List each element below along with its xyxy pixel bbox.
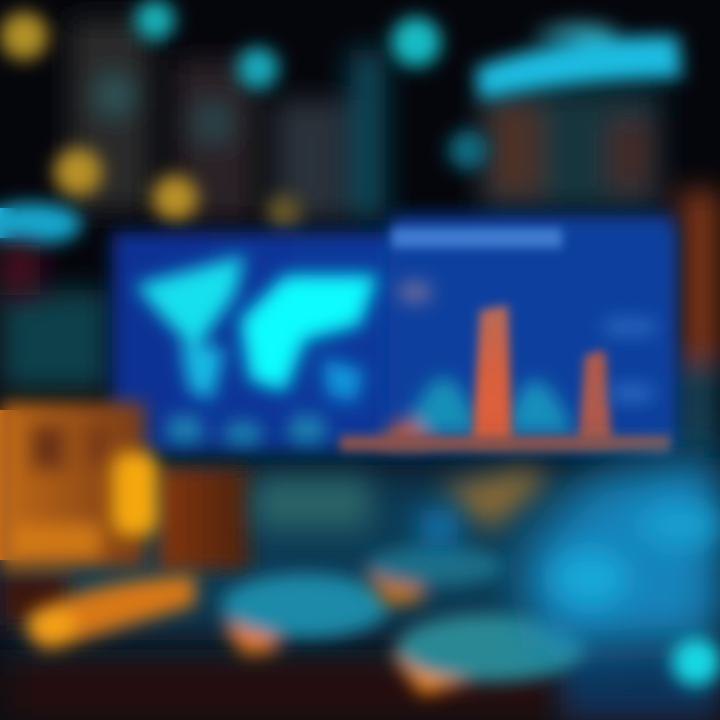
background: cyan awning top right bbox=[475, 22, 682, 100]
icon: cyan glow bottom right bbox=[672, 638, 720, 686]
panel glow: right column bbox=[390, 215, 675, 445]
icon: orange pill left bbox=[27, 575, 195, 650]
text: legend right column bbox=[400, 282, 655, 401]
background: cyan sign left edge fill bbox=[0, 208, 18, 238]
icon: small disc centre bbox=[365, 546, 503, 606]
panel: blue cards right bbox=[520, 455, 720, 650]
background: cyan sign left bbox=[0, 203, 82, 245]
background: bokeh lights bbox=[0, 0, 488, 229]
icon: teal disc centre right bbox=[392, 614, 584, 695]
stack: left edge fill bbox=[0, 410, 24, 560]
stack: orange coins left bbox=[0, 402, 145, 625]
heading: screen title bar bbox=[392, 228, 562, 248]
icon: yellow glow bbox=[112, 452, 158, 536]
background: red glow left bbox=[0, 245, 40, 295]
chart: red bars bbox=[472, 305, 612, 445]
chart: area peaks bbox=[380, 378, 575, 445]
map: world continents bbox=[135, 255, 378, 402]
chart: left baseline marks bbox=[168, 416, 324, 446]
panel: navy corner bottom right bbox=[560, 640, 720, 720]
panel: teal tablet middle bbox=[255, 478, 370, 528]
icon: teal disc centre left bbox=[221, 574, 389, 655]
icon: orange gold mid bbox=[440, 468, 550, 530]
chart: baseline bbox=[340, 436, 670, 452]
block: brown box bbox=[158, 468, 250, 570]
background: city buildings bbox=[0, 20, 720, 450]
desk base bbox=[0, 650, 720, 720]
panel: dashboard screen bbox=[112, 215, 675, 454]
icon: bright blue glows right bbox=[420, 503, 720, 606]
